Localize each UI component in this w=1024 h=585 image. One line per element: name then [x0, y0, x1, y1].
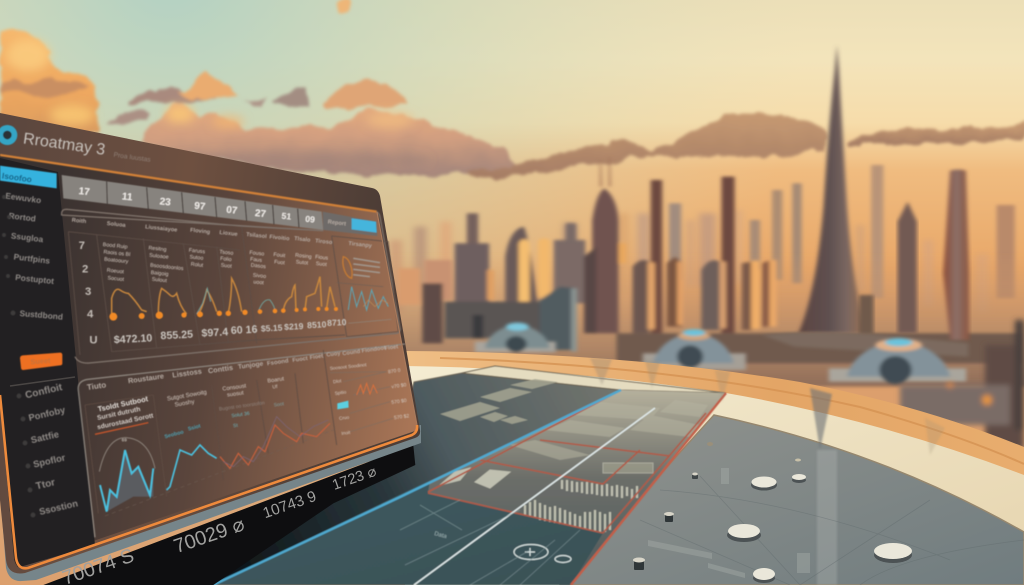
right mini chart: Dlot: [333, 378, 342, 384]
right mini chart: v70 $0: [391, 382, 407, 390]
lower panel headings: Cound Fiondoot: [342, 345, 386, 357]
date tab row: 97: [194, 201, 206, 213]
dark foreground buildings at right edge: [900, 320, 1024, 450]
date tab row: 17: [78, 186, 91, 198]
dome building left: [475, 323, 556, 352]
tablet black base with numbers: [43, 445, 415, 585]
base number: 10743 9: [261, 488, 319, 522]
teal lower panel: [213, 480, 603, 585]
small descriptions: Socuot: [107, 275, 125, 283]
tablet dashboard: [0, 113, 420, 573]
sidebar bullets: [2, 195, 36, 518]
lower panel headings: Roustaure: [127, 371, 164, 385]
amounts: $97.4: [201, 326, 229, 340]
sidebar menu: Purtfpins: [13, 251, 51, 266]
lower sidebar menu: Sattfie: [30, 429, 60, 445]
sidebar menu: Postuptot: [15, 272, 55, 286]
right mini chart: 570 $2: [394, 413, 410, 421]
upper panel outline: [62, 209, 400, 363]
small descriptions: Rolut: [190, 262, 204, 269]
small descriptions: Baigoig: [150, 270, 169, 278]
lower sidebar menu: Spoflor: [32, 452, 67, 470]
lower panel headings: Conttis: [207, 363, 234, 375]
tablet silver lip: [0, 425, 421, 581]
red panel lines: [428, 390, 706, 533]
right mini chart: Soosoot Soodinot: [330, 362, 367, 371]
lower panel headings: Tunjoge: [238, 360, 264, 371]
small descriptions: Fious: [315, 254, 329, 262]
orange line charts: [112, 277, 335, 315]
lower panel dividers: [85, 350, 337, 513]
middle card labels: Bugost oo toorstofon: [219, 400, 265, 413]
small descriptions: Folio: [220, 256, 232, 263]
middle card labels: Consoust: [222, 383, 247, 393]
orange header line: [0, 155, 377, 212]
gauge arc: [99, 438, 155, 472]
small descriptions: [102, 242, 329, 286]
row numbers: 2: [82, 263, 88, 275]
near towers: [398, 157, 1021, 363]
right mini chart: Inoit: [341, 430, 351, 436]
lower card heading: Tsoldt Sutboot: [97, 394, 149, 414]
gauge area: [107, 450, 153, 512]
main spire: [798, 45, 867, 333]
upper panel heading labels: Floving: [190, 228, 211, 236]
small descriptions: Dasos: [250, 263, 266, 270]
middle card labels: Uf: [272, 384, 278, 391]
middle card labels: Soot: [273, 401, 285, 409]
lower panel headings: Fioet: [384, 344, 399, 352]
orange screen frame: [0, 395, 417, 568]
middle card labels: Sutgot Sowoitg: [167, 390, 207, 403]
small descriptions: Bsoosdoonlos: [150, 263, 184, 272]
sidebar menu: Rortod: [8, 210, 36, 224]
sidebar menu: Sustdbond: [19, 308, 63, 322]
right mini chart: 570 $0: [391, 398, 407, 406]
low-level haze: [374, 253, 1024, 387]
upper panel heading labels: Liussaiayoe: [145, 224, 178, 234]
upper panel heading labels: Roith: [71, 218, 87, 225]
top pale strip: [462, 366, 726, 393]
lower card heading: Sursit dutruth: [97, 406, 141, 422]
middle card labels: Ssiot: [187, 423, 202, 433]
sidebar menu: Eewuvko: [5, 190, 42, 205]
lower panel headings: Fuoct: [292, 356, 308, 364]
row numbers: U: [89, 334, 98, 346]
amounts: 60 16: [231, 324, 258, 337]
amounts: 8710: [327, 317, 347, 328]
red trend line: [220, 423, 330, 468]
hazy far towers: [390, 210, 989, 313]
middle card labels: suosut: [227, 390, 245, 399]
lower panel headings: Fsoond: [267, 358, 289, 367]
small descriptions: Suloaoe: [149, 253, 169, 261]
middle card labels: St: [233, 423, 239, 429]
amounts: $472.10: [114, 332, 153, 346]
small descriptions: Sutot: [295, 259, 309, 267]
clouds: [0, 0, 1024, 178]
sidebar divider: [10, 377, 75, 386]
sidebar tab label: Isoofoo: [1, 170, 33, 184]
amounts: 8510: [307, 319, 327, 330]
small descriptions: Sulout: [151, 277, 168, 284]
sidebar active tab: [0, 166, 57, 188]
plaza ring around spire: [762, 332, 968, 357]
lower sidebar menu: Confloit: [24, 382, 64, 401]
row numbers: 4: [87, 309, 94, 321]
spire reflection: [590, 358, 945, 585]
date tab row: [62, 175, 323, 230]
upper panel heading labels: Soluoa: [106, 221, 127, 229]
table data panels: [195, 366, 726, 585]
lower panel headings: [86, 344, 399, 392]
pale blocks in left panel: [440, 379, 558, 424]
upper panel heading labels: [71, 218, 373, 250]
upper panel heading labels: Lioxue: [219, 230, 238, 238]
small sensor nubs: [633, 442, 801, 570]
right mini card: [337, 257, 383, 287]
lower card heading: [95, 394, 155, 434]
lower half drawn in zoom coordinates: [20, 344, 410, 537]
right mini chart: [330, 362, 410, 436]
panel grid lines: [400, 500, 580, 585]
upper panel heading labels: Tlsalo: [294, 236, 311, 244]
lower sidebar menu: Ssostion: [38, 498, 79, 517]
logo: [0, 125, 17, 145]
small descriptions: Suot: [315, 261, 327, 268]
small descriptions: Fouso: [249, 250, 264, 258]
double red edge line: [571, 393, 726, 585]
base number: 1723 ⌀: [330, 464, 379, 494]
small descriptions: Resitng: [148, 245, 167, 253]
platform cream band: [405, 366, 1024, 585]
lower sidebar menu: Ponfoby: [28, 405, 67, 423]
small descriptions: Raois os Bl: [103, 249, 131, 258]
centre panel: [400, 390, 726, 585]
muted trend line: [223, 417, 328, 467]
white discs: [727, 474, 912, 583]
small descriptions: uoot: [253, 279, 265, 286]
small descriptions: Boatooury: [104, 257, 129, 265]
screen area: [0, 155, 418, 567]
sidebar: [0, 158, 95, 567]
upper panel heading labels: Tiroso: [315, 238, 333, 246]
sidebar menu: Ssugloa: [10, 230, 44, 244]
middle card labels: Suoshy: [174, 399, 195, 409]
small block near spire: [859, 295, 874, 335]
pointed tower: [898, 202, 917, 333]
amounts: [114, 317, 347, 346]
date tab row: 07: [226, 205, 238, 217]
tablet body: [0, 113, 420, 573]
city skyline: [374, 45, 1024, 387]
white divider line: [414, 408, 655, 585]
small descriptions: Tsoso: [219, 249, 234, 257]
right mini chart: Spitio: [334, 389, 347, 396]
middle card labels: Solut 36: [231, 411, 250, 419]
sidebar button: Sueet: [30, 356, 51, 366]
small descriptions: Bood Ruip: [102, 242, 128, 251]
baseline dashes: [105, 430, 333, 516]
row numbers: 3: [85, 286, 91, 298]
upper panel heading labels: Fivoitio: [269, 234, 290, 242]
faded mid towers: [669, 165, 1015, 298]
lower sidebar menu: Ttor: [35, 477, 56, 492]
middle card labels: [164, 376, 285, 440]
second cyan chart: [167, 445, 217, 490]
right sparkline orange: [363, 300, 388, 307]
blue glowing line: [213, 390, 621, 585]
cloud highlights: [6, 39, 430, 168]
amounts: 855.25: [160, 329, 193, 342]
report button group: Report: [327, 219, 346, 228]
teal overlay lines: [197, 288, 275, 314]
lower panel headings: Tiuto: [86, 380, 107, 392]
small descriptions: Sutoo: [189, 254, 204, 262]
right mini chart: 870 0: [388, 368, 401, 375]
sidebar menu: [5, 190, 63, 322]
date tab row: 27: [254, 208, 267, 220]
platform rim: [405, 351, 1024, 585]
title: Rroatmay 3: [22, 130, 106, 159]
lower card heading: sdurostaad Sorott: [97, 412, 155, 431]
middle card labels: Boarut: [267, 376, 285, 385]
left grey panel with dark reflection under tablet: [195, 373, 621, 585]
date tab row: 11: [121, 191, 133, 203]
base number: 70029 ⌀: [171, 513, 247, 558]
report button group: [323, 212, 377, 236]
small descriptions: Faruss: [188, 248, 206, 255]
lower panel headings: Cuoy: [326, 351, 342, 359]
circular emblem: [514, 544, 571, 562]
small descriptions: Suot: [220, 263, 232, 270]
bar chart cells: [440, 463, 653, 532]
middle card labels: Seoboo: [164, 429, 185, 440]
small descriptions: Roeuot: [106, 268, 125, 275]
gauge cyan line: [100, 450, 153, 512]
right mini chart: Cruo: [339, 415, 350, 421]
row numbers: [79, 240, 98, 346]
small descriptions: Faus: [250, 257, 263, 264]
date tab row: 23: [159, 196, 172, 209]
amounts: $5.15: [261, 323, 283, 334]
small descriptions: Fuot: [274, 259, 286, 266]
small descriptions: Rosing: [295, 253, 312, 260]
lower panel headings: Lisstoss: [172, 367, 202, 380]
right sparkline: [348, 287, 388, 310]
dome building right: [829, 338, 966, 384]
label text on table: Data: [433, 531, 448, 540]
gauge label: 69: [122, 438, 127, 443]
date tab row: 51: [281, 211, 292, 222]
upper panel heading labels: Tsilasol: [246, 232, 267, 240]
lower panel outline: [78, 344, 405, 537]
small descriptions: Sivoo: [252, 273, 266, 280]
disc circuit lines: [640, 476, 1024, 585]
pale text blocks in centre panel: [510, 400, 708, 460]
axis ticks: [348, 319, 392, 323]
chart end markers: [109, 307, 338, 321]
date tab row: 09: [305, 214, 316, 225]
lower panel headings: Fioet: [309, 353, 324, 361]
upper half drawn in zoom coordinates: [0, 125, 400, 363]
upper panel sub-grid: [68, 227, 398, 355]
tall copper tower: [943, 169, 969, 340]
amounts: $219: [284, 321, 304, 332]
upper panel heading labels: Tirsanpy: [348, 241, 373, 250]
lower sidebar menu: [24, 382, 79, 517]
sidebar button: [20, 353, 62, 370]
subtitle: Proa Iuustas: [113, 152, 152, 164]
small descriptions: Fouit: [273, 252, 286, 259]
row numbers: 7: [79, 240, 85, 252]
right screen edge: [377, 212, 417, 425]
dome building centre: [643, 329, 746, 370]
faint rectangles on disc: [648, 468, 810, 578]
platform inner disc: [560, 415, 1024, 585]
